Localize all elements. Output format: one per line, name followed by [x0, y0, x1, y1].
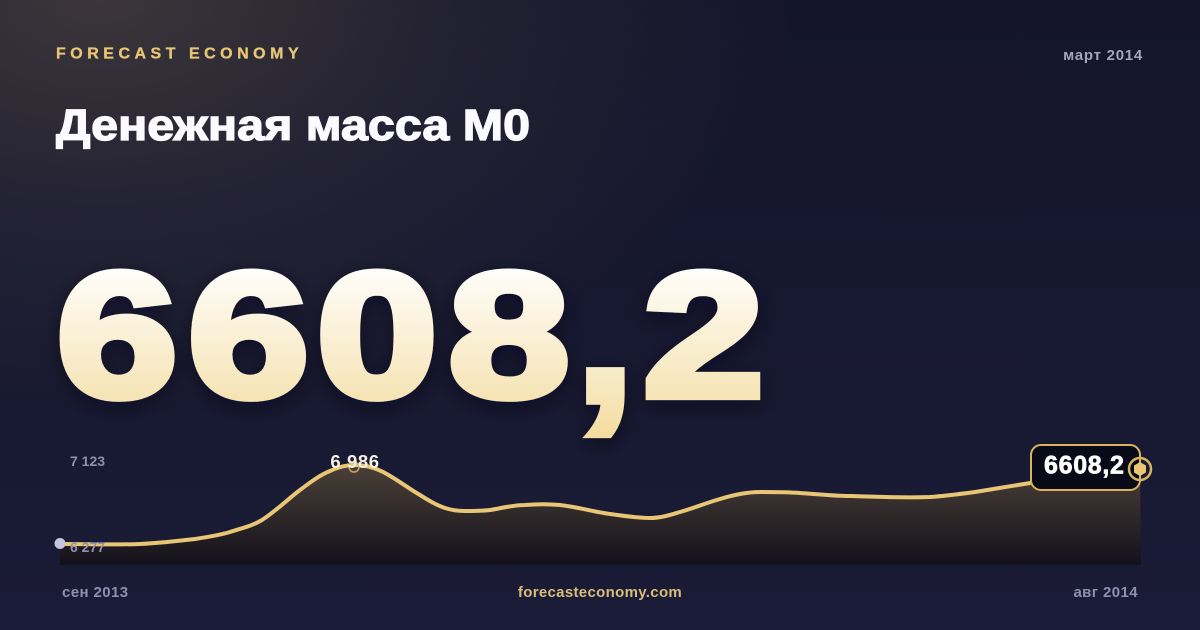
line [60, 465, 1140, 544]
big value: 2 [643, 236, 764, 434]
end date: авг 2014 [1073, 584, 1138, 601]
big value: 6 [57, 236, 177, 434]
big value: 0 [317, 236, 437, 434]
current value callout [1031, 445, 1140, 490]
current value callout: 6608,2 [1044, 452, 1125, 480]
sparkline chart [54, 445, 1151, 565]
area under line [60, 465, 1141, 565]
start point [54, 538, 66, 549]
peak value: 6 986 [330, 451, 380, 472]
brand label: FORECAST ECONOMY [56, 46, 303, 62]
title: Денежная масса М0 [56, 101, 530, 150]
big value: 6 [188, 236, 309, 434]
big value: , [573, 208, 637, 448]
peak marker [349, 462, 359, 472]
date: март 2014 [1063, 47, 1143, 64]
end marker [1129, 458, 1151, 480]
site url: forecasteconomy.com [518, 584, 682, 601]
start date: сен 2013 [62, 584, 128, 601]
max axis label: 7 123 [70, 453, 105, 469]
big value: 8 [449, 236, 569, 434]
big value [57, 208, 764, 448]
min axis label: 6 277 [70, 539, 105, 555]
